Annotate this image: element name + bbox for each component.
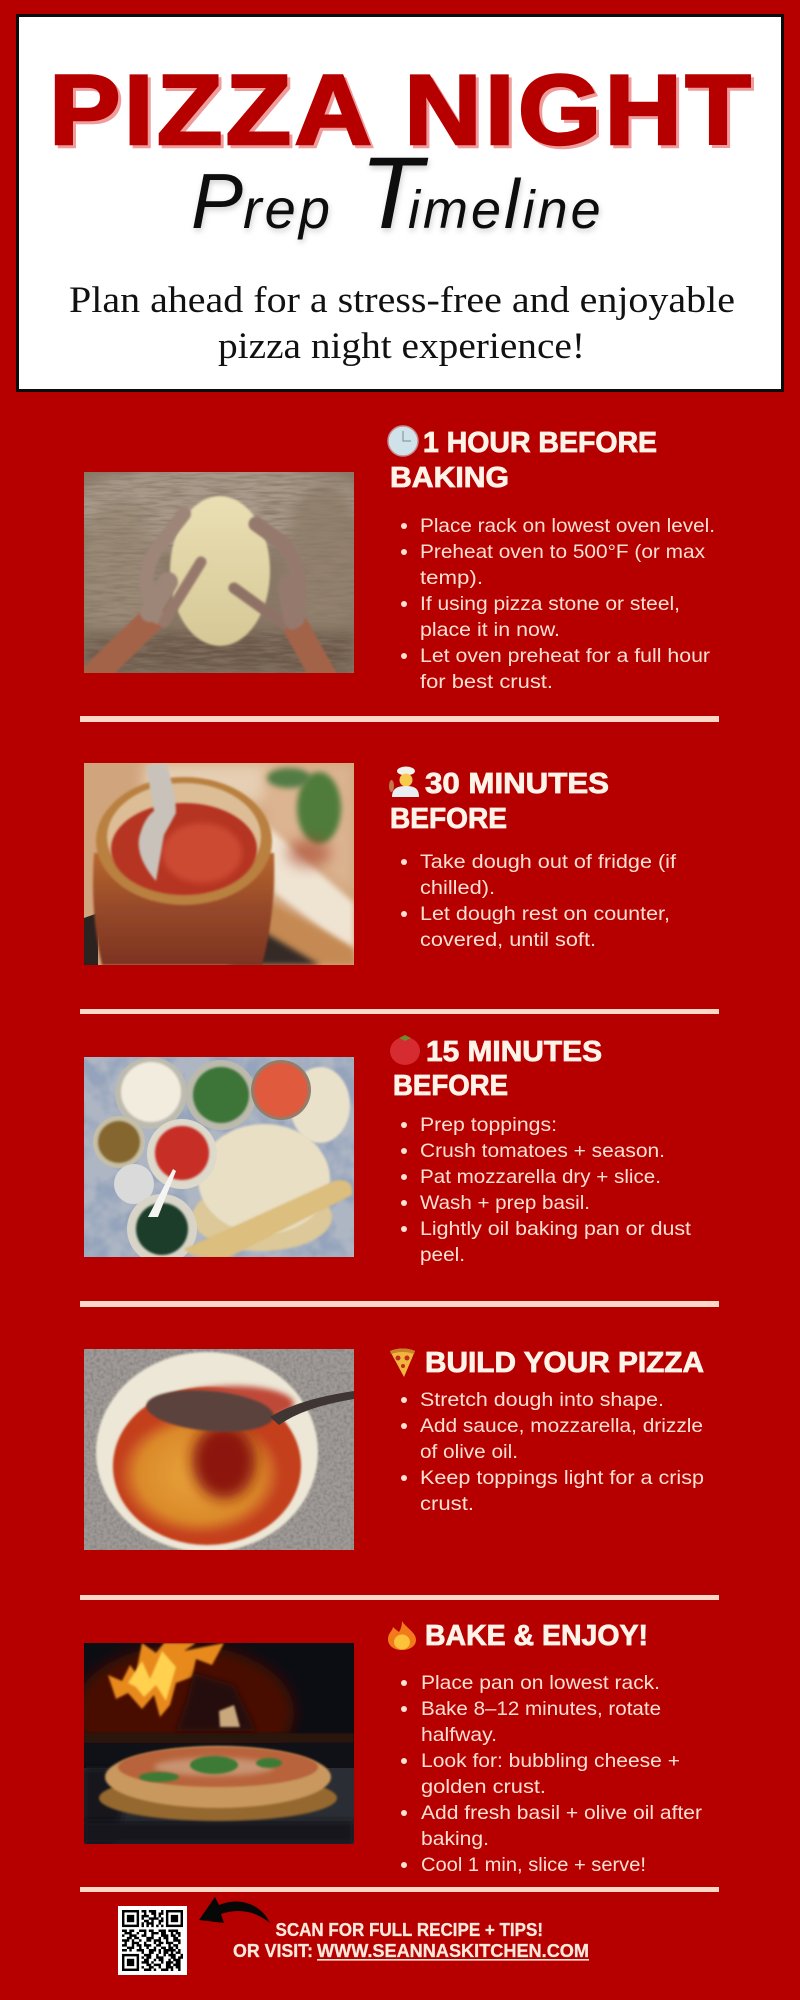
call to action text: OR VISIT: xyxy=(233,1941,313,1961)
photo: prepared toppings xyxy=(84,1057,354,1257)
tagline: Plan ahead for a stress-free and enjoyable xyxy=(69,280,735,321)
subtitle: Prep Timeline: imeline xyxy=(408,165,604,243)
header panel xyxy=(18,16,782,390)
subtitle: Prep Timeline: T xyxy=(360,136,429,250)
heading: build your pizza: BUILD YOUR PIZZA xyxy=(425,1347,704,1379)
tagline xyxy=(69,280,735,367)
bullet list: Bake 8–12 minutes, rotate xyxy=(421,1698,661,1720)
bullet list: Let dough rest on counter, xyxy=(420,903,670,925)
bullet list: baking. xyxy=(421,1828,489,1850)
bullet list xyxy=(401,515,715,693)
bullet list: Place pan on lowest rack. xyxy=(421,1672,660,1694)
heading: 30 minutes before xyxy=(389,766,609,835)
heading: 15 minutes before: 15 MINUTES xyxy=(426,1036,602,1068)
heading: 15 minutes before xyxy=(390,1035,602,1102)
bullet list: chilled). xyxy=(420,877,495,899)
bullet list: Look for: bubbling cheese + xyxy=(421,1750,680,1772)
icon: clock xyxy=(388,426,418,456)
photo: sauce jar xyxy=(84,763,354,965)
photo: pizza and wood oven xyxy=(84,1643,354,1844)
photo: hands shaping dough xyxy=(84,472,354,673)
heading: 1 hour before baking xyxy=(388,426,657,494)
heading: 1 hour before baking: 1 HOUR BEFORE xyxy=(423,427,657,459)
title: Pizza Night: PIZZA NIGHT xyxy=(52,57,757,168)
bullet list: peel. xyxy=(420,1244,465,1266)
heading: bake and enjoy: BAKE & ENJOY! xyxy=(425,1620,648,1652)
bullet list xyxy=(401,1114,692,1266)
panel: bake and enjoy xyxy=(74,1620,703,1876)
bullet list: temp). xyxy=(420,567,483,589)
bullet list xyxy=(401,1672,703,1876)
bullet list: Add fresh basil + olive oil after xyxy=(421,1802,703,1824)
bullet list: Place rack on lowest oven level. xyxy=(420,515,715,537)
bullet list: Let oven preheat for a full hour xyxy=(420,645,711,667)
tagline: pizza night experience! xyxy=(218,326,585,367)
QR code xyxy=(118,1906,187,1975)
panel: build your pizza xyxy=(84,1347,704,1552)
icon: chef xyxy=(389,766,419,797)
footer xyxy=(118,1897,589,1975)
bullet list: If using pizza stone or steel, xyxy=(420,593,680,615)
bullet list: covered, until soft. xyxy=(420,929,596,951)
bullet list: Crush tomatoes + season. xyxy=(420,1140,665,1162)
icon: pizza slice xyxy=(390,1348,415,1377)
bullet list: of olive oil. xyxy=(420,1441,518,1463)
bullet list: crust. xyxy=(420,1493,474,1515)
bullet list: Pat mozzarella dry + slice. xyxy=(420,1166,661,1188)
bullet list: Take dough out of fridge (if xyxy=(420,851,677,873)
bullet list: for best crust. xyxy=(420,671,553,693)
bullet list xyxy=(401,851,677,951)
panel: 30 minutes before xyxy=(84,763,677,965)
panel: 15 minutes before xyxy=(84,1035,692,1266)
bullet list: Prep toppings: xyxy=(420,1114,557,1136)
heading: 1 hour before baking: BAKING xyxy=(390,462,509,494)
heading: 30 minutes before: 30 MINUTES xyxy=(425,768,609,800)
bullet list xyxy=(401,1389,704,1515)
bullet list: Wash + prep basil. xyxy=(420,1192,590,1214)
arrow pointing to QR code xyxy=(199,1897,270,1923)
call to action text xyxy=(233,1920,589,1961)
bullet list: golden crust. xyxy=(421,1776,546,1798)
bullet list: Preheat oven to 500°F (or max xyxy=(420,541,705,563)
icon: tomato xyxy=(390,1035,420,1065)
heading: 15 minutes before: BEFORE xyxy=(393,1070,508,1102)
heading: 30 minutes before: BEFORE xyxy=(390,803,507,835)
bullet list: Keep toppings light for a crisp xyxy=(420,1467,704,1489)
subtitle: Prep Timeline xyxy=(191,136,604,250)
bullet list: Lightly oil baking pan or dust xyxy=(420,1218,692,1240)
bullet list: place it in now. xyxy=(420,619,560,641)
photo: saucing the dough xyxy=(84,1349,354,1550)
bullet list: Add sauce, mozzarella, drizzle xyxy=(420,1415,703,1437)
bullet list: Cool 1 min, slice + serve! xyxy=(421,1854,646,1876)
title: Pizza Night: PIZZA NIGHT xyxy=(49,54,754,165)
subtitle: Prep Timeline: Prep xyxy=(191,157,333,245)
bullet list: halfway. xyxy=(421,1724,497,1746)
icon: fire xyxy=(388,1621,416,1650)
call to action text: SCAN FOR FULL RECIPE + TIPS! xyxy=(276,1920,543,1940)
call to action text: WWW.SEANNASKITCHEN.COM xyxy=(317,1941,589,1961)
bullet list: Stretch dough into shape. xyxy=(420,1389,664,1411)
panel: 1 hour before baking xyxy=(69,426,715,693)
